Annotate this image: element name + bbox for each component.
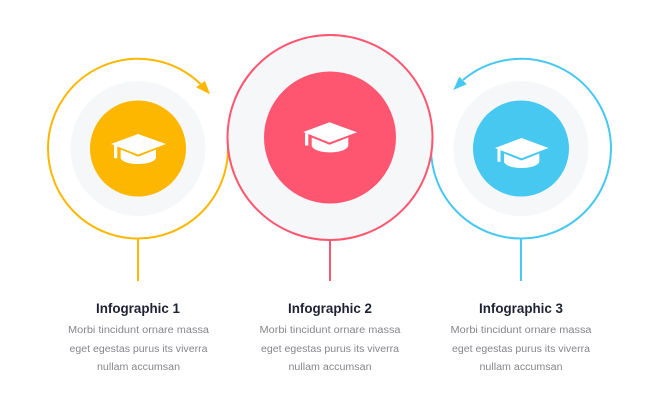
light circle with ring 2 <box>228 35 432 240</box>
colored circle 3 <box>473 100 569 196</box>
ring arc with arrow 1 <box>48 59 228 239</box>
colored circle 1 <box>90 100 186 196</box>
body 1: nullam accumsan <box>97 362 180 373</box>
ring arc with arrow 3 <box>431 59 611 239</box>
stem line 1 <box>137 238 139 281</box>
heading 3: Infographic 3 <box>479 301 563 316</box>
body 1 <box>68 325 209 373</box>
body 1: eget egestas purus its viverra <box>70 344 208 355</box>
body 2 <box>260 325 401 373</box>
body 1: Morbi tincidunt ornare massa <box>68 325 209 336</box>
text block 3 <box>450 301 592 373</box>
text block 1 <box>68 301 209 373</box>
panel: infographic 3 <box>431 59 611 281</box>
light circle 3 <box>454 81 588 216</box>
icon: graduation cap 3 <box>495 138 548 168</box>
stem line 2 <box>329 240 331 281</box>
body 2: Morbi tincidunt ornare massa <box>260 325 401 336</box>
text block 2 <box>260 301 401 373</box>
body 3: Morbi tincidunt ornare massa <box>450 325 592 336</box>
heading 2: Infographic 2 <box>288 301 372 316</box>
colored circle 2 <box>264 72 396 204</box>
body 2: nullam accumsan <box>288 362 372 373</box>
heading 1: Infographic 1 <box>96 301 180 316</box>
panel: infographic 1 <box>48 59 228 281</box>
body 3 <box>450 325 592 373</box>
icon: graduation cap 2 <box>303 122 357 152</box>
icon: graduation cap 1 <box>111 134 166 164</box>
panel: infographic 2 <box>228 35 432 281</box>
body 2: eget egestas purus its viverra <box>261 344 399 355</box>
body 3: eget egestas purus its viverra <box>452 344 590 355</box>
body 3: nullam accumsan <box>480 362 562 373</box>
light circle 1 <box>70 81 206 216</box>
stem line 3 <box>520 238 522 281</box>
